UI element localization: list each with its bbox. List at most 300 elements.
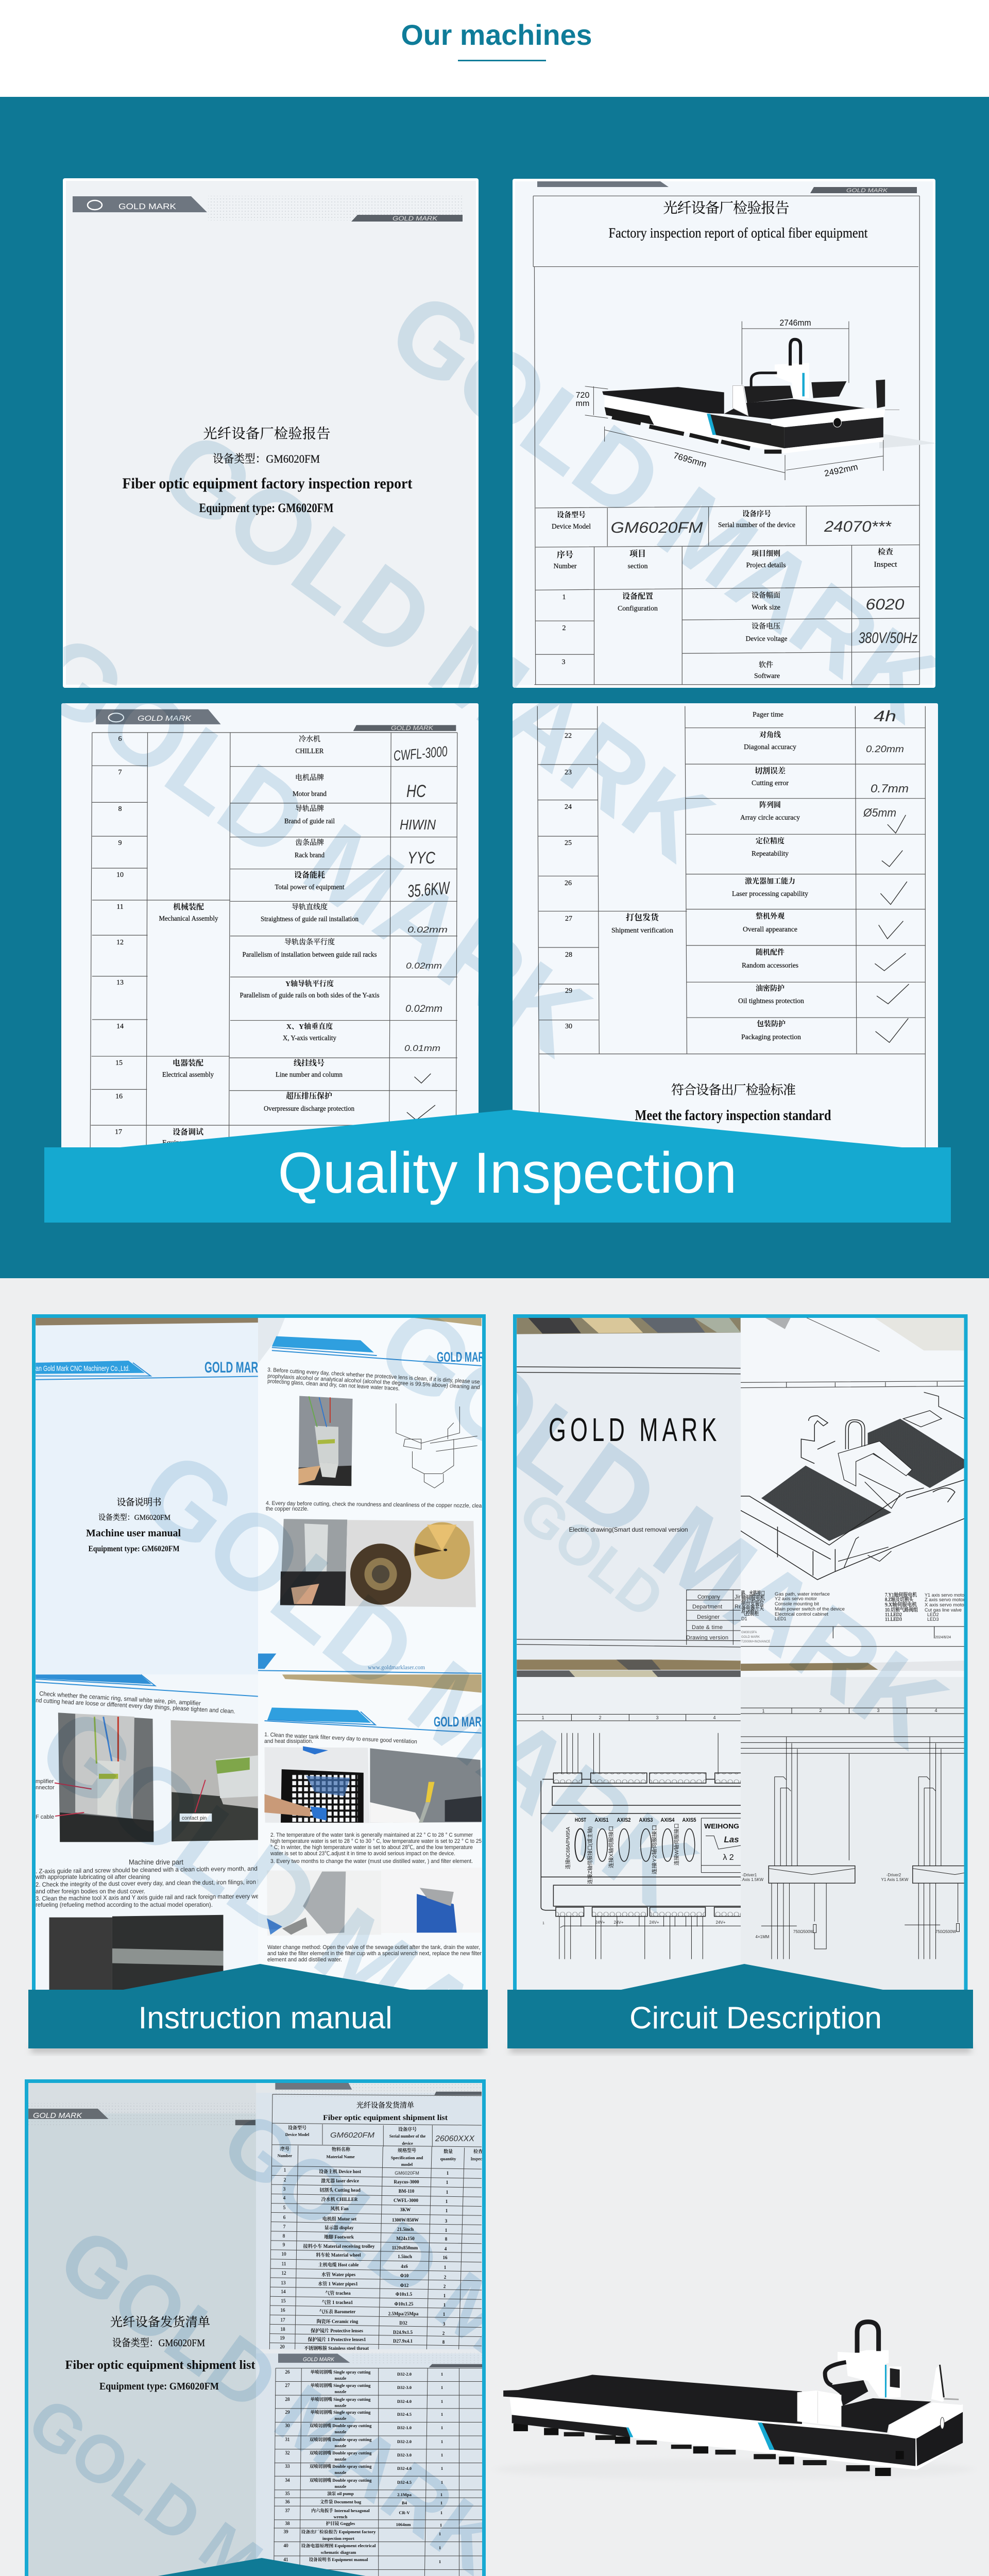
shipment list rows 26-41: 1 [441,2425,443,2430]
report table text: Device voltage [746,635,787,643]
project details column: Repeatability [752,850,789,858]
circuit page: driver wiring: 2 [819,1708,822,1713]
shipment list rows 26-41: 内六角扳手 Internal hexagonal [311,2508,370,2513]
handwritten values: 0.7mm [871,782,909,795]
handwritten values: 0.02mm [406,961,442,971]
delivery list table pages: Material Name [327,2154,355,2159]
shipment list rows 1-20: 1 [444,2293,446,2298]
circuit page: cover: Department [692,1604,722,1610]
report table text: Serial number of the device [718,521,795,529]
shipment list rows 26-41: 单喷切割嘴 Single spray cutting [311,2369,371,2375]
section names: Mechanical Assembly [159,915,218,923]
shipment list rows 1-20: 11 [282,2261,286,2266]
shipment list rows 26-41: 29 [285,2410,290,2415]
shipment list rows 1-20: 1 [444,2265,447,2270]
panel: inspection table page rows 6-17: GOLD MARK [391,724,434,732]
shipment list rows 26-41: 33 [285,2464,290,2469]
shipment list rows 26-41: B4 [402,2500,407,2505]
shipment list rows 1-20: 水管 1 Water pipes1 [318,2281,358,2286]
circuit page: cover: Re [735,1604,742,1610]
shipment list rows 1-20: 4x6 [401,2264,408,2269]
manual page: machine drive part: . Z-axis guide rail and screw should be cleaned with a clean cloth every month, and s [36,1865,262,1875]
manual page: machine drive part: refueling (refueling method according to the actual model operation). [36,1901,213,1908]
shipment list rows 26-41: 32 [285,2450,289,2455]
panel: lower section background [0,1278,989,2576]
row numbers: 14 [116,1023,124,1030]
panel: inspection report page with machine drawing: 光纤设备厂检验报告 [663,200,789,216]
row numbers: 11 [116,903,124,911]
handwritten values: YYC [407,849,436,867]
shipment list rows 26-41: 1 [441,2371,443,2377]
row numbers: 29 [565,987,572,995]
manual cover page: 设备说明书 [116,1497,162,1507]
conformity statement: Meet the factory inspection standard [635,1107,831,1124]
delivery list table pages: 光纤设备发货清单 [356,2101,414,2110]
shipment list rows 1-20: 2.5Mpa/25Mpa [388,2311,419,2316]
manual page: machine drive part: with appropriate lubricating oil after cleaning [35,1873,150,1880]
circuit page: controller wiring: 连接W轴伺服接口 [673,1823,680,1866]
watermark: GOLD MARK over delivery list [15,2093,678,2576]
panel: inspection table page rows 6-17: GOLD MARK [138,714,192,723]
shipment list rows 1-20: 1 [446,2190,449,2195]
project details column: Parallelism of guide rails on both sides of the Y-axis [240,992,379,999]
watermark: GOLD MARK over inspection pages: GOLD MARK [12,611,610,1079]
shipment list rows 1-20: GM6020FM [395,2171,419,2176]
frame: instruction manual [34,1316,484,1996]
panel: inspection report cover page [63,178,479,688]
manual cover page: GOLD MARK [204,1359,265,1376]
panel: inspection table page rows 6-17 [61,703,479,1151]
shipment list rows 1-20: 保护镜片 1 Protective lenses1 [308,2336,366,2342]
section names: 机械装配 [173,902,204,911]
shipment list rows 26-41: 1 [441,2385,443,2390]
manual page: water tank maintenance: Water change method: Open the valve of the sewage outlet after the tank, drain the water, [267,1944,480,1951]
project details column: Motor brand [293,790,327,798]
row numbers: 22 [565,732,572,740]
shipment list rows 1-20: M24x150 [396,2236,415,2241]
shipment list rows 1-20: BM-110 [399,2189,415,2194]
circuit page: cover: Jin [735,1594,742,1600]
shipment list rows 1-20: 激光器 laser device [321,2178,359,2183]
delivery list table pages: Device Model [285,2132,310,2137]
shipment list rows 26-41: 41 [283,2557,288,2562]
circuit page: controller wiring: 2 [599,1715,602,1720]
shipment list rows 1-20: 8 [445,2236,448,2242]
circuit page: driver wiring: 3 [877,1708,880,1713]
shipment list rows 26-41: D32-4.5 [397,2480,412,2485]
project details column: 导轨品牌 [295,804,324,813]
row numbers: 16 [115,1093,123,1100]
manual page: water tank maintenance: 3. Every two months to change the water (must use distilled water, ) and filter element. [270,1858,473,1865]
circuit page: isometric machine drawing [741,1317,966,1679]
report table text: Project details [746,562,786,569]
section names: 电器装配 [173,1058,203,1067]
shipment list rows 1-20: 设备主机 Device host [319,2168,361,2174]
shipment list rows 26-41: D32-2.0 [397,2439,412,2444]
panel: circuit description pages [117,1281,983,1996]
shipment list rows 26-41: 1 [440,2522,442,2528]
delivery list table pages: Number [278,2154,293,2158]
circuit page: driver wiring: Y1 Axis 1.5KW [881,1877,909,1882]
delivery list table pages: 设备型号 [288,2125,306,2130]
shipment list rows 26-41: 双喷切割嘴 Double spray cutting [310,2450,372,2455]
shipment list rows 1-20: Φ12 [400,2283,409,2288]
handwritten values: HIWIN [400,817,436,833]
watermark: GOLD MARK over circuit pages: GOLD [507,1480,675,1631]
shipment list rows 26-41: 油泵 oil pump [327,2491,354,2496]
shipment list rows 1-20: 10 [281,2251,286,2257]
shipment list rows 26-41: 30 [285,2423,290,2428]
circuit page: controller wiring: AXIS4 [660,1817,675,1823]
circuit page: controller wiring: 24V+ [614,1920,624,1925]
watermark: GOLD MARK over circuit pages: GOLD MARK [356,1281,967,1771]
machine illustration with dimensions: 2746mm [780,318,811,328]
shipment list rows 1-20: 4 [445,2246,447,2251]
project details column: 阵列圆 [759,801,781,809]
shipment list rows 26-41: 1 [441,2399,443,2404]
report table text: section [627,563,648,570]
report table text: 380V/50Hz [858,630,918,647]
shipment list rows 26-41: 26 [285,2369,290,2375]
manual page: water tank maintenance: and take the filter element in the filter cup with a special wrench next, replace the new filter [267,1951,482,1957]
machine illustration with dimensions: 2492mm [824,462,859,479]
delivery list table pages: GOLD MARK [303,2357,335,2363]
shipment list rows 26-41: 34 [285,2478,290,2483]
shipment list rows 1-20: 5 [283,2205,286,2210]
manual page: water tank maintenance: ° C; In winter, the high temperature water is set to about 28℃, and the low temperature [270,1844,473,1851]
manual page: water tank maintenance: GOLD MARK [434,1714,488,1730]
circuit page: controller wiring: 1 [541,1715,544,1720]
shipment list rows 1-20: 1 [446,2180,449,2185]
circuit page: isometric machine drawing: 11.LED3 [885,1617,902,1622]
banner: delivery list [20,2558,490,2576]
section names: Equipment debug [162,1139,214,1147]
circuit page: controller wiring: 连接NC68A/PM95A [565,1827,571,1869]
banner: circuit description: Circuit Description [629,2001,882,2035]
manual cover page [36,1317,265,1674]
shipment list rows 26-41: nozzle [335,2484,347,2489]
report table text: 软件 [759,661,773,669]
circuit page: isometric machine drawing: Cut gas line valve [925,1607,962,1613]
shipment list rows 26-41: 31 [285,2437,289,2442]
shipment list rows 26-41: 1 [441,2412,443,2417]
shipment list rows 1-20: 切割头 Cutting head [319,2187,361,2193]
circuit page: controller wiring: 连接X轴伺服接口 [608,1826,615,1868]
circuit page: isometric machine drawing: LED3 [927,1617,939,1622]
circuit page: isometric machine drawing: T2000M+INOVANCE [741,1640,770,1643]
manual page: machine drive part: 3. Clean the machine tool X axis and Y axis guide rail and rack foreign matter every wee [36,1892,262,1902]
circuit page: isometric machine drawing: Electrical control cabinet [775,1612,829,1617]
delivery list table pages: quantity [440,2156,456,2161]
report table text: 6020 [865,596,905,613]
shipment list rows 1-20: 18 [280,2327,285,2332]
shipment list rows 1-20: 电机组 Motor set [322,2216,356,2222]
report table text: 设备配置 [622,591,653,601]
shipment list rows 26-41: 1 [439,2559,441,2564]
circuit page: isometric machine drawing: 制台安装位 [741,1599,764,1606]
circuit page: controller wiring: λ 2 [723,1853,734,1862]
shipment list rows 26-41: inspection report [322,2536,354,2541]
section names: 设备调试 [173,1128,203,1137]
manual page: protective lens and nozzle: GOLD MARK [437,1349,491,1365]
project details column: Diagonal accuracy [744,743,796,751]
manual page: protective lens and nozzle: prophylaxis alcohol or analytical alcohol (alcohol the degree is 99.5% above) cleaning and [267,1373,480,1391]
report table text: Device Model [552,523,591,531]
shipment list rows 26-41: D32-3.0 [397,2452,412,2458]
panel: inspection report cover page: Equipment type: GM6020FM [199,501,334,515]
manual page: machine drive part [35,1674,262,1994]
circuit page: controller wiring: HOST [575,1817,586,1823]
shipment list rows 1-20: 3KW [400,2207,411,2212]
manual page: water tank maintenance: 1. Clean the water tank filter every day to ensure good ventilation [264,1732,417,1745]
project details column: Overall appearance [743,926,797,934]
project details column: X, Y-axis verticality [283,1035,336,1042]
machine illustration with dimensions: mm [576,399,589,408]
project details column: 激光器加工能力 [745,877,795,886]
shipment list rows 1-20: 1 [284,2167,286,2173]
panel: inspection table page rows 22-30 [513,703,938,1151]
shipment list rows 1-20: Φ10x1.5 [396,2292,413,2297]
project details column: 油密防护 [756,984,785,993]
conformity statement [635,1083,831,1124]
watermark: GOLD MARK over inspection pages [12,268,962,1079]
shipment list rows 26-41: nozzle [335,2389,347,2394]
shipment list rows 26-41: nozzle [335,2429,347,2434]
shipment list rows 1-20 [280,2167,449,2351]
panel: quality inspection section background [0,97,989,1278]
circuit page: isometric machine drawing: LED1 [775,1616,787,1621]
shipment list rows 1-20: 接料小车 Material receiving trolley [303,2243,375,2249]
manual page: protective lens and nozzle: 3. Before cutting every day, check whether the protective lens is clean, if it is dirty, please use [267,1367,480,1385]
project details column: 整机外观 [756,912,785,921]
project details column: Array circle accuracy [740,814,800,822]
handwritten values: CWFL-3000 [393,743,448,764]
shipment list rows 1-20: 1300W/850W [392,2217,419,2223]
report table text: Configuration [618,605,658,613]
conformity statement: 符合设备出厂检验标准 [671,1083,796,1097]
shipment verification section [611,912,673,935]
report table text: Inspect [874,561,897,569]
project details column: Overpressure discharge protection [264,1105,354,1113]
shipment list rows 1-20: 1 [443,2312,446,2317]
row numbers: 7 [118,769,122,776]
circuit page: isometric machine drawing: Console mounting bit [775,1601,819,1606]
report table text: 检查 [878,547,893,556]
machine illustration with dimensions [576,318,937,480]
row numbers: 26 [565,879,572,887]
circuit page: driver wiring [739,1677,983,1994]
shipment list rows 1-20: 7 [283,2224,286,2229]
project details column: Laser processing capability [732,890,808,898]
report table text: 2 [562,624,566,632]
shipment list rows 26-41: 1 [441,2439,443,2444]
project details column: Packaging protection [741,1033,801,1041]
shipment list rows 26-41: 1 [439,2545,441,2550]
shipment list rows 26-41 [283,2369,443,2564]
shipment list rows 1-20: 16 [280,2308,285,2313]
shipment list rows 1-20: Raycus-3000 [394,2179,419,2184]
shipment list rows 26-41: 1 [441,2480,443,2485]
shipment list rows 1-20: 陶瓷环 Ceramic ring [317,2318,359,2324]
delivery list table pages: model [401,2162,413,2167]
manual page: machine drive part: mplifier [36,1778,54,1785]
row numbers: 28 [565,951,572,959]
project details column: 线挂线号 [294,1058,325,1067]
shipment list rows 26-41: nozzle [335,2416,347,2421]
circuit page: controller wiring: AXIS5 [682,1817,696,1823]
shadow: manual and circuit banners [31,2045,971,2053]
panel: inspection report cover page: Fiber optic equipment factory inspection report [123,475,413,492]
shipment list rows 1-20: 1 [445,2228,448,2233]
row numbers: 23 [565,769,572,776]
shipment list rows 1-20: 6 [283,2215,286,2220]
report table grid [533,196,919,685]
watermark: GOLD MARK over manual: GOLD MARK [117,1427,718,1933]
shipment list rows 26-41: 35 [285,2491,290,2496]
delivery list table pages: Serial number of the [389,2134,426,2139]
handwritten values: 35.6KW [407,878,451,902]
shipment list rows 1-20: 1 [446,2208,448,2213]
shipment list rows 26-41: CR-V [399,2510,410,2515]
delivery list table pages: 设备序号 [398,2126,417,2132]
shipment list rows 26-41: 27 [285,2383,290,2388]
report table text: 设备电压 [752,622,780,631]
project details column: 包装防护 [757,1020,786,1028]
report table text: 项目细则 [752,549,780,558]
manual cover page: Equipment type: GM6020FM [89,1545,179,1553]
shipment list rows 26-41: 1 [441,2466,443,2471]
delivery list table pages: 数量 [444,2148,453,2154]
shipment list rows 1-20: 8 [442,2340,445,2345]
shipment list rows 1-20: D24.9x1.5 [393,2330,413,2335]
shipment list rows 26-41: 双喷切割嘴 Double spray cutting [310,2437,372,2442]
circuit page: isometric machine drawing: GOLD MARK [741,1636,760,1639]
project details column: CHILLER [296,748,324,755]
frame: delivery list [27,2081,484,2576]
shipment list rows 1-20: 3 [443,2321,446,2327]
delivery list cover page: 光纤设备发货清单 [110,2315,210,2329]
project details column: 冷水机 [299,735,320,743]
shipment list rows 26-41: nozzle [335,2456,347,2462]
handwritten values [393,743,451,1053]
delivery list cover page [28,2082,256,2576]
project details column [240,735,379,1113]
frame: circuit description [515,1316,966,1996]
manual page: machine drive part: contact pin [182,1816,207,1821]
shipment list rows 1-20: Φ10x1.25 [395,2301,414,2307]
project details column: Line number and column [276,1071,343,1079]
circuit page: cover: Company [697,1594,720,1600]
shipment list rows 26-41: nozzle [335,2470,347,2475]
watermark: GOLD MARK over manual [18,1281,718,2173]
circuit page: controller wiring: 连接Z轴伺服接口(或主轴) [587,1826,593,1884]
shipment list rows 1-20: 2 [444,2275,447,2280]
handwritten values [863,708,909,819]
manual page: machine drive part: Machine drive part [129,1858,183,1866]
shipment list rows 1-20: 气压表 Barometer [319,2309,355,2314]
delivery list cover page: Fiber optic equipment shipment list [65,2359,255,2372]
manual page: machine drive part: nnector [36,1785,55,1791]
circuit page: driver wiring: 750Ω500W [935,1929,957,1934]
shipment list rows 26-41: 2.1Mpa [397,2492,412,2497]
circuit page: isometric machine drawing: 10.切割气路阀组 [885,1606,918,1613]
report table text: 设备幅面 [752,591,780,600]
report table text: 3 [561,658,566,666]
circuit page: driver wiring: X Axis 1.5KW [739,1877,764,1882]
shipment list rows 1-20: 地脚 Footwork [324,2234,354,2240]
shipment list rows 1-20: 4 [283,2195,286,2200]
shipment list rows 26-41: 1 [441,2452,443,2458]
manual page: machine drive part: Check whether the ceramic ring, small white wire, pin, amplifier [39,1690,201,1707]
circuit page: controller wiring: 3 [656,1715,659,1720]
circuit page: isometric machine drawing: 11.LED2 [885,1612,902,1617]
delivery list table pages: 检查 [473,2148,483,2154]
manual page: protective lens and nozzle: 4. Every day before cutting, check the roundness and cleanliness of the copper nozzle, clean [266,1500,485,1509]
manual cover page: Machine user manual [86,1528,181,1539]
shipment list rows 26-41: 1064nm [396,2522,411,2527]
circuit page: driver wiring: 4 [934,1708,937,1713]
handwritten values: HC [406,782,426,801]
banner: instruction manual: Instruction manual [138,2001,393,2035]
watermark: GOLD MARK over manual: GOLD [356,1281,680,1563]
delivery list table pages: 物料名称 [332,2146,351,2152]
shipment list rows 1-20: 9 [283,2242,285,2247]
banner: circuit description [507,1964,973,2048]
shipment list rows 1-20: 1 [447,2171,449,2176]
shipment list rows 1-20: 3 [445,2218,448,2224]
project details column: X、Y轴垂直度 [286,1022,333,1031]
manual page: machine drive part: F cable [36,1814,54,1820]
shipment list rows 26-41: 1 [440,2500,442,2505]
circuit page: controller wiring: WEIHONG [704,1822,739,1830]
panel: inspection report page with machine drawing [513,179,937,688]
project details column: Random accessories [742,962,798,970]
shipment list rows 26-41: 39 [283,2529,288,2534]
shipment list rows 1-20: 2 [284,2177,286,2182]
delivery list table pages [256,2081,484,2576]
row numbers: 12 [116,939,124,946]
delivery list table pages: GM6020FM [330,2131,375,2140]
panel: instruction manual pages [18,1281,718,2173]
shipment list rows 1-20: 水管 Water pipes [321,2272,356,2277]
circuit page: driver wiring: 4×1MM [756,1935,770,1939]
shipment list rows 26-41: nozzle [335,2443,347,2448]
shipment list rows 1-20: CWFL-3000 [394,2198,418,2203]
project details column: Parallelism of installation between guide rail racks [242,951,377,959]
shipment list rows 1-20: 风机 Fan [330,2206,349,2211]
row numbers: 24 [565,803,572,811]
panel: inspection report page with machine drawing: GOLD MARK [846,188,888,194]
title: Our machines [401,19,592,51]
shipment list rows 26-41: schematic diagram [321,2550,356,2555]
shipment list rows 1-20: 2 [444,2284,446,2289]
manual page: water tank maintenance: and heat dissipation. [264,1738,313,1744]
circuit page: cover: Date & time [692,1624,723,1631]
row numbers: 25 [565,839,572,847]
circuit page: controller wiring: 1 [542,1922,544,1925]
circuit page: controller wiring: 连接Y2轴伺服接口 [651,1825,658,1874]
shipment list rows 26-41: 设备出厂检验报告 Equipment factory [301,2529,376,2534]
shipment list rows 1-20: 主机电缆 Host cable [318,2262,359,2267]
shipment list rows 26-41: wrench [334,2514,348,2519]
delivery list table pages: 26060XXX [435,2134,475,2143]
shipment list rows 1-20: 3 [283,2187,286,2192]
row numbers: 15 [115,1059,123,1067]
circuit page: isometric machine drawing: 路、水路接口 [741,1589,765,1597]
handwritten values: Ø5mm [863,806,896,819]
circuit page: controller wiring: AXIS3 [639,1817,653,1823]
shipment list rows 1-20: 15 [281,2298,286,2303]
